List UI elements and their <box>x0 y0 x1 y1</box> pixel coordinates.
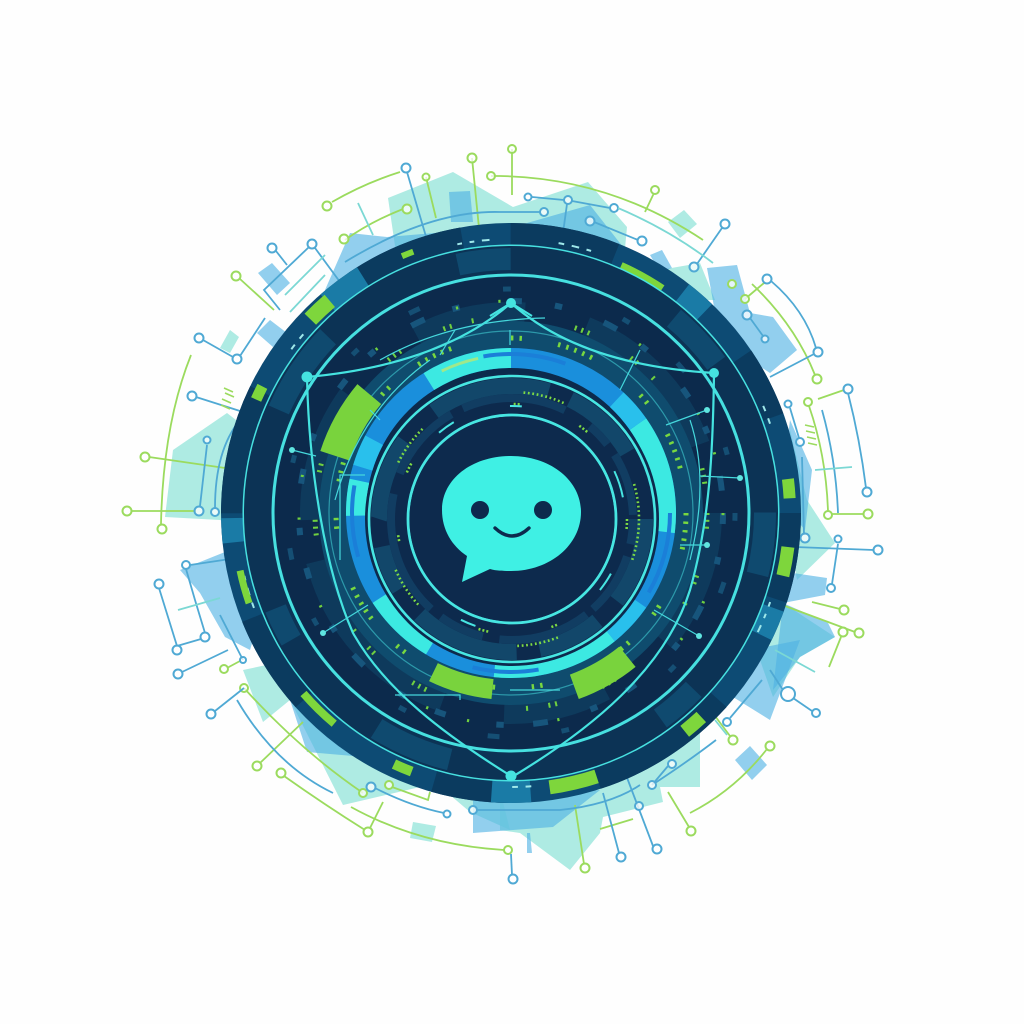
inner green dots <box>385 392 639 646</box>
background shards: light blue <box>180 191 835 853</box>
background shards: pale teal <box>165 172 835 870</box>
green panels in the middle band <box>251 253 771 773</box>
left eye <box>471 501 489 519</box>
outer circuit traces: green <box>122 145 872 872</box>
main dial rings <box>116 118 906 908</box>
outer circuit traces: teal <box>178 203 852 735</box>
chat bubble icon <box>442 456 581 582</box>
middle teal circuit band <box>287 289 735 737</box>
tick marks on the rim <box>221 388 817 445</box>
inner broken cyan arcs <box>353 360 671 678</box>
outer circuit traces: blue <box>154 164 882 884</box>
smile <box>495 528 529 536</box>
outer band segments <box>153 155 869 871</box>
thin circuit details inside dial <box>289 318 743 700</box>
outer band green blocks <box>116 118 906 908</box>
right eye <box>534 501 552 519</box>
inner dial <box>353 360 671 678</box>
shield outline <box>302 298 719 782</box>
cyan and blue segmented ring <box>292 294 730 732</box>
green dash arcs <box>299 301 723 725</box>
inner band segments <box>379 386 645 652</box>
second band segments <box>257 259 765 767</box>
